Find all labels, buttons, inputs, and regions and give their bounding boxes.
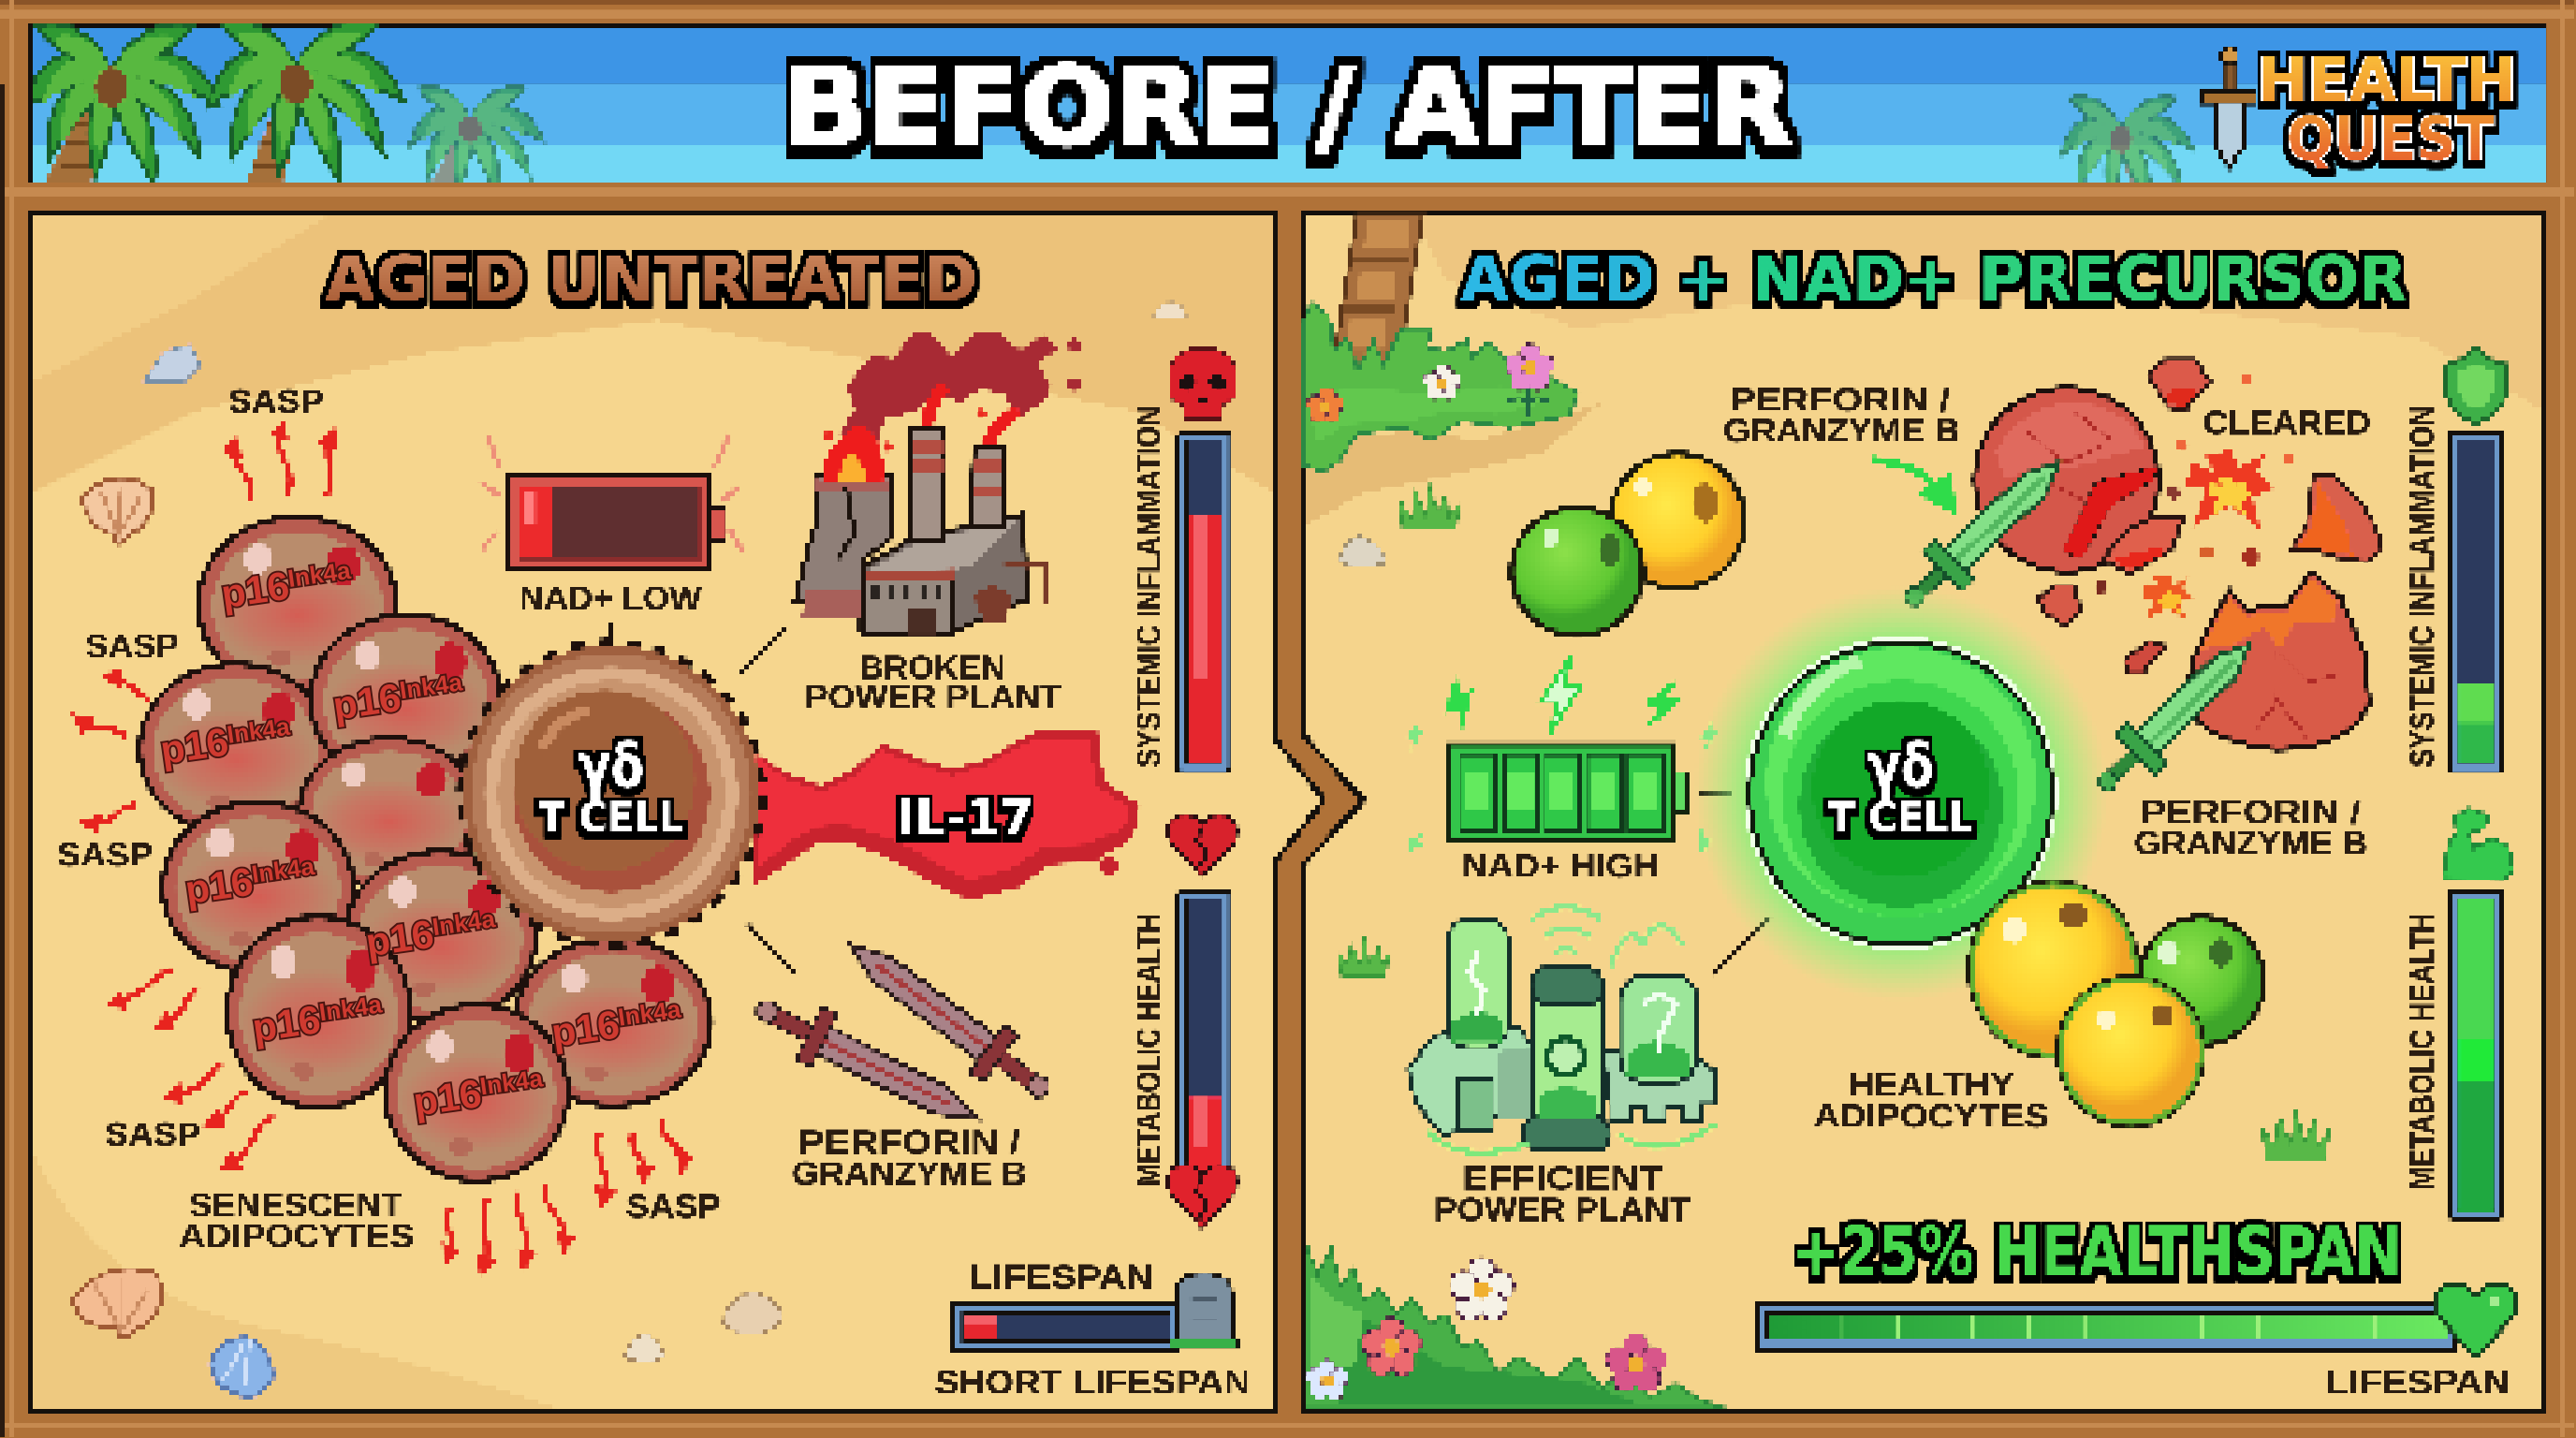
label: cleared: CLEARED xyxy=(2203,404,2371,441)
icon: broken power plant xyxy=(795,333,1081,634)
label: gamma delta T cell, after: γδ xyxy=(1868,732,1934,802)
logo wordmark: HEALTH xyxy=(2258,45,2517,114)
SASP labels xyxy=(57,384,721,1225)
connector lines right xyxy=(1701,792,1771,976)
icon: NAD+ high battery xyxy=(1449,744,1687,840)
cell marker labels: p16 xyxy=(183,859,256,912)
label: systemic inflammation: SYSTEMIC INFLAMMATION xyxy=(2404,406,2440,768)
green arrow xyxy=(1873,460,1943,496)
icon: efficient power plant xyxy=(1408,907,1715,1152)
label: healthy adipocytes: ADIPOCYTES xyxy=(1814,1098,2049,1135)
decorative shells and pebbles left xyxy=(72,302,1186,1397)
left panel artwork xyxy=(30,212,1325,1412)
heading: aged untreated: AGED UNTREATED xyxy=(326,242,977,315)
cell marker labels: p16 xyxy=(363,912,436,964)
bar: metabolic health after xyxy=(2450,890,2502,1219)
main title: BEFORE / AFTER xyxy=(783,44,1793,170)
label: NAD+ high: NAD+ HIGH xyxy=(1462,848,1660,885)
gamma delta T cell, aged xyxy=(460,642,762,945)
bar: lifespan extended xyxy=(1756,1303,2454,1351)
label: perforin granzyme: PERFORIN / xyxy=(798,1124,1020,1161)
label: senescent adipocytes: SENESCENT xyxy=(189,1187,403,1224)
heading: +25% healthspan: +25% HEALTHSPAN xyxy=(1793,1212,2402,1291)
label: broken power plant: POWER PLANT xyxy=(805,679,1061,715)
IL-17 cytokine blob xyxy=(753,729,1140,901)
label: gamma delta T cell, after xyxy=(1828,732,1973,842)
cell marker labels: p16 xyxy=(250,997,323,1050)
gamma delta T cell, rejuvenated xyxy=(1694,587,2108,1001)
cell marker labels: Ink4a xyxy=(285,556,353,593)
senescent adipocyte cluster xyxy=(139,517,711,1181)
banner sky xyxy=(30,23,2548,184)
label: gamma delta T cell, before: γδ xyxy=(578,732,644,802)
icon: gravestone xyxy=(1170,1273,1238,1349)
icon: shield xyxy=(2446,348,2507,424)
label: healthy adipocytes: HEALTHY xyxy=(1848,1067,2014,1104)
cell marker labels: p16 xyxy=(411,1071,484,1124)
cell marker labels: Ink4a xyxy=(226,712,292,749)
logo: health quest xyxy=(2203,45,2517,173)
dying adipocyte top with sword xyxy=(1889,388,2159,624)
panel: aged untreated xyxy=(30,212,1325,1412)
label: efficient power plant: EFFICIENT xyxy=(1462,1161,1663,1197)
label: gamma delta T cell, before xyxy=(539,732,683,842)
cell marker labels xyxy=(157,554,685,1124)
cell marker labels: Ink4a xyxy=(317,990,384,1026)
right panel text labels xyxy=(1434,382,2510,1401)
bar: short lifespan xyxy=(953,1305,1177,1351)
connector lines left xyxy=(611,621,797,976)
SASP labels: SASP xyxy=(626,1189,721,1225)
icon: broken heart top xyxy=(1168,815,1237,877)
cell marker labels: p16 xyxy=(549,1002,622,1055)
grass and flowers bottom xyxy=(1306,1245,1725,1408)
label: IL-17: IL-17 xyxy=(897,790,1033,847)
SASP labels: SASP xyxy=(105,1116,200,1152)
label: efficient power plant: POWER PLANT xyxy=(1434,1192,1691,1228)
icon: broken perforin swords xyxy=(744,921,1064,1145)
label: lifespan: LIFESPAN xyxy=(2324,1364,2510,1401)
icon: broken heart bottom xyxy=(1168,1165,1237,1229)
palm trees in banner xyxy=(33,23,2195,183)
SASP arrows xyxy=(82,431,683,1265)
cell marker labels: p16 xyxy=(157,719,231,772)
panel: aged + NAD+ precursor xyxy=(1303,212,2545,1412)
cleared shards and fire xyxy=(2037,360,2382,674)
label: NAD+ low: NAD+ LOW xyxy=(520,580,702,617)
label: metabolic health: METABOLIC HEALTH xyxy=(2404,914,2440,1190)
palm trunk and grass top xyxy=(1305,215,1579,472)
heading: aged + NAD+ precursor: AGED + NAD+ PRECURSOR xyxy=(1460,242,2407,315)
label: systemic inflammation: SYSTEMIC INFLAMMATION xyxy=(1131,406,1167,768)
icon: skull xyxy=(1170,348,1236,419)
label: gamma delta T cell, after: T CELL xyxy=(1828,794,1973,842)
dying adipocyte lower with sword xyxy=(2082,572,2369,808)
label: lifespan: LIFESPAN xyxy=(970,1259,1153,1296)
right panel artwork xyxy=(1303,212,2545,1412)
cell marker labels: Ink4a xyxy=(431,904,497,941)
bar: systemic inflammation before xyxy=(1178,433,1231,772)
SASP labels: SASP xyxy=(228,384,324,420)
icon: lightning bolts xyxy=(1397,657,1721,863)
label: perforin granzyme lower: PERFORIN / xyxy=(2141,794,2361,830)
small grass and rock decor xyxy=(1339,482,2330,1160)
label: perforin granzyme lower: GRANZYME B xyxy=(2134,826,2367,862)
icon: green heart xyxy=(2435,1284,2517,1357)
label: senescent adipocytes: ADIPOCYTES xyxy=(179,1218,414,1255)
logo wordmark xyxy=(2258,45,2517,173)
label: perforin granzyme top: PERFORIN / xyxy=(1730,382,1951,418)
SASP labels: SASP xyxy=(57,837,153,873)
cell marker labels: p16 xyxy=(218,564,292,616)
label: metabolic health: METABOLIC HEALTH xyxy=(1131,914,1167,1186)
left panel text labels xyxy=(57,384,1251,1401)
icon: muscle xyxy=(2443,809,2513,881)
cell marker labels: Ink4a xyxy=(478,1064,545,1100)
icon: logo sword xyxy=(2203,48,2256,168)
bar: metabolic health before xyxy=(1178,890,1231,1180)
cell marker labels: p16 xyxy=(330,675,403,728)
label: broken power plant: BROKEN xyxy=(859,650,1005,686)
SASP labels: SASP xyxy=(85,628,179,665)
logo wordmark: QUEST xyxy=(2287,104,2494,173)
cell marker labels: Ink4a xyxy=(398,668,464,704)
label: perforin granzyme: GRANZYME B xyxy=(792,1155,1027,1192)
label: perforin granzyme top: GRANZYME B xyxy=(1723,413,1960,449)
sand background left xyxy=(30,212,1325,1412)
icon: NAD+ low battery xyxy=(479,433,742,568)
cell marker labels: Ink4a xyxy=(250,852,316,888)
cell marker labels: Ink4a xyxy=(616,995,682,1032)
healthy adipocytes bottom xyxy=(1969,881,2264,1127)
label: short lifespan: SHORT LIFESPAN xyxy=(935,1364,1251,1401)
sand background right xyxy=(1303,212,2545,1412)
healthy adipocytes top xyxy=(1512,453,1745,636)
bar: systemic inflammation after xyxy=(2450,433,2502,772)
label: gamma delta T cell, before: T CELL xyxy=(539,794,683,842)
